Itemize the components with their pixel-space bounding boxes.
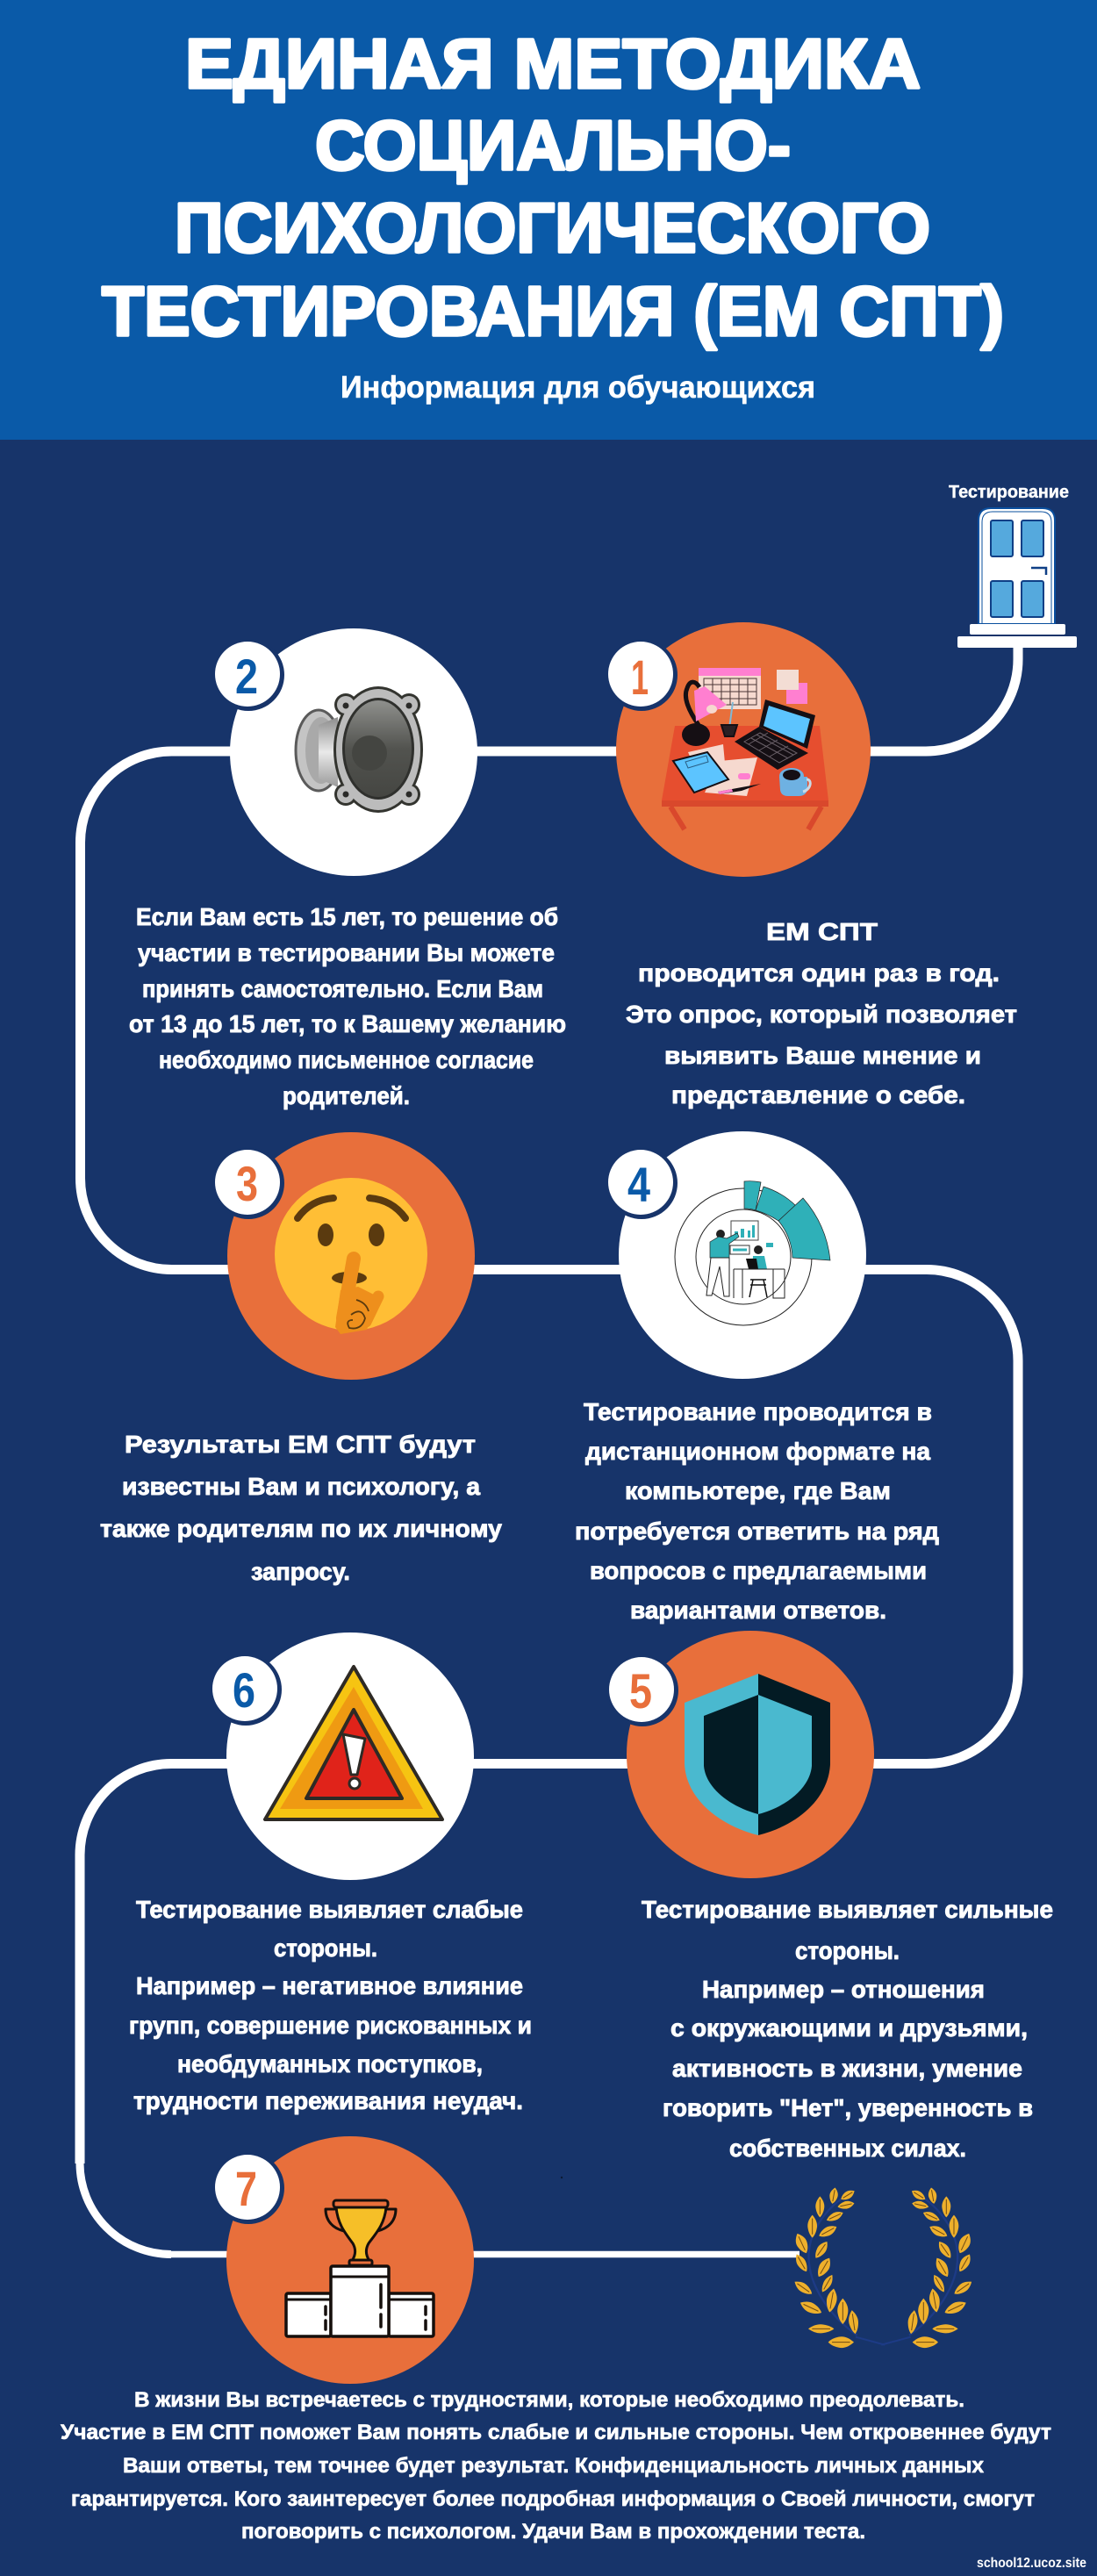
text block: step 5: стороны. — [795, 1937, 900, 1964]
panel: step 3 — [100, 1132, 502, 1585]
step circle — [619, 1131, 866, 1379]
text block: step 2: необходимо письменное согласие — [159, 1046, 534, 1073]
panel: step 7 — [212, 2136, 474, 2384]
text block: closing message — [61, 2388, 1051, 2544]
panel: step 1 — [606, 622, 1017, 1109]
number badge 6 — [210, 1654, 282, 1726]
icon: trophy on podium — [286, 2200, 434, 2336]
text block: step 3: известны Вам и психологу, а — [122, 1473, 480, 1500]
text block: step 6: необдуманных поступков, — [177, 2050, 483, 2077]
icon: shushing face — [275, 1178, 427, 1334]
stray dot — [561, 2177, 563, 2178]
text block: step 2: принять самостоятельно. Если Вам — [142, 975, 543, 1002]
text block: step 6: трудности переживания неудач. — [133, 2087, 523, 2114]
text block: step 3 — [100, 1431, 502, 1585]
text block: step 4 — [575, 1398, 939, 1624]
number badge 2 — [212, 639, 284, 711]
title: ТЕСТИРОВАНИЯ (ЕМ СПТ) — [102, 272, 1004, 350]
number badge 5: 5 — [629, 1663, 652, 1719]
number badge 3: 3 — [236, 1156, 258, 1211]
text block: step 2: родителей. — [283, 1082, 410, 1109]
text block: step 3: также родителям по их личному — [100, 1515, 502, 1542]
number badge 1 — [606, 639, 678, 711]
text block: step 5: говорить "Нет", уверенность в — [663, 2094, 1033, 2121]
title: ЕДИНАЯ МЕТОДИКА — [185, 25, 921, 103]
number badge 5 — [606, 1654, 678, 1726]
text block: step 3: запросу. — [251, 1558, 350, 1585]
step circle — [227, 1132, 475, 1380]
text block: step 1: Это опрос, который позволяет — [626, 1001, 1017, 1028]
text block: step 5: Тестирование выявляет сильные — [642, 1896, 1053, 1923]
title: СОЦИАЛЬНО- — [315, 106, 791, 184]
text block: step 4: потребуется ответить на ряд — [575, 1518, 939, 1545]
number badge 1: 1 — [631, 649, 649, 705]
icon: shield — [685, 1674, 830, 1835]
number badge 4: 4 — [627, 1157, 650, 1212]
text block: step 6: Тестирование выявляет слабые — [136, 1896, 523, 1923]
number badge 6: 6 — [233, 1662, 255, 1718]
text block: step 2: от 13 до 15 лет, то к Вашему желанию — [129, 1010, 566, 1037]
step circle — [230, 628, 477, 876]
icon: laurel wreath — [792, 2187, 974, 2348]
step circle — [226, 2136, 474, 2384]
number badge 2: 2 — [235, 649, 258, 704]
icon: desk with laptop — [662, 668, 828, 829]
text block: step 2 — [129, 903, 566, 1109]
text block: step 6: стороны. — [274, 1934, 377, 1962]
icon: people analysing a chart — [675, 1181, 830, 1325]
text block: step 4: вопросов с предлагаемыми — [590, 1557, 927, 1584]
text block: step 5: собственных силах. — [729, 2135, 966, 2162]
text block: closing message: Ваши ответы, тем точнее будет результат. Конфиденциальность личных данных — [123, 2454, 985, 2478]
text block: step 4: вариантами ответов. — [630, 1597, 886, 1624]
number badge 7: 7 — [235, 2161, 257, 2216]
text block: step 6: групп, совершение рискованных и — [129, 2012, 532, 2039]
text block: closing message: гарантируется. Кого заинтересует более подробная информация о Своей личности, смогут — [71, 2487, 1035, 2511]
text block: step 4: Тестирование проводится в — [584, 1398, 932, 1425]
text block: step 6: Например – негативное влияние — [136, 1972, 523, 1999]
text block: step 5: Например – отношения — [702, 1976, 985, 2003]
icon: door — [957, 508, 1077, 648]
number badge 7 — [212, 2152, 284, 2224]
title: ПСИХОЛОГИЧЕСКОГО — [175, 189, 930, 267]
text block: closing message: поговорить с психологом. Удачи Вам в прохождении теста. — [241, 2520, 865, 2544]
text block: step 5: с окружающими и друзьями, — [670, 2014, 1028, 2041]
door label: Тестирование — [949, 483, 1069, 502]
step circle — [226, 1632, 474, 1880]
number badge 3 — [212, 1147, 284, 1219]
header band — [0, 0, 1097, 440]
title — [102, 25, 1004, 350]
text block: closing message: Участие в ЕМ СПТ поможет Вам понять слабые и сильные стороны. Чем откровеннее будут — [61, 2421, 1051, 2444]
text block: step 1 — [626, 918, 1017, 1109]
panel: step 4 — [575, 1131, 939, 1624]
text block: step 5 — [642, 1896, 1053, 2162]
text block: step 1: представление о себе. — [671, 1081, 965, 1109]
text block: step 6 — [129, 1896, 532, 2114]
text block: step 2: участии в тестировании Вы можете — [138, 939, 555, 966]
panel: step 5 — [606, 1631, 1053, 2162]
text block: step 4: компьютере, где Вам — [625, 1477, 891, 1504]
text block: step 2: Если Вам есть 15 лет, то решение об — [136, 903, 558, 930]
text block: step 5: активность в жизни, умение — [672, 2055, 1022, 2082]
step circle — [616, 622, 871, 877]
text block: step 1: проводится один раз в год. — [638, 959, 1000, 987]
step circle — [627, 1631, 874, 1878]
text block: step 3: Результаты ЕМ СПТ будут — [125, 1431, 476, 1458]
number badge 4 — [606, 1147, 678, 1219]
icon: warning triangle — [265, 1667, 442, 1819]
text block: step 1: ЕМ СПТ — [766, 918, 878, 945]
subtitle: Информация для обучающихся — [341, 370, 815, 405]
text block: step 1: выявить Ваше мнение и — [664, 1042, 981, 1069]
text block: step 4: дистанционном формате на — [585, 1438, 930, 1465]
connector path — [80, 648, 1018, 2254]
panel: door, start of the route — [949, 483, 1077, 648]
panel: step 6 — [129, 1632, 532, 2114]
icon: loudspeaker — [296, 686, 423, 813]
text block: closing message: В жизни Вы встречаетесь с трудностями, которые необходимо преодолевать. — [134, 2388, 964, 2412]
panel: step 2 — [129, 628, 566, 1109]
